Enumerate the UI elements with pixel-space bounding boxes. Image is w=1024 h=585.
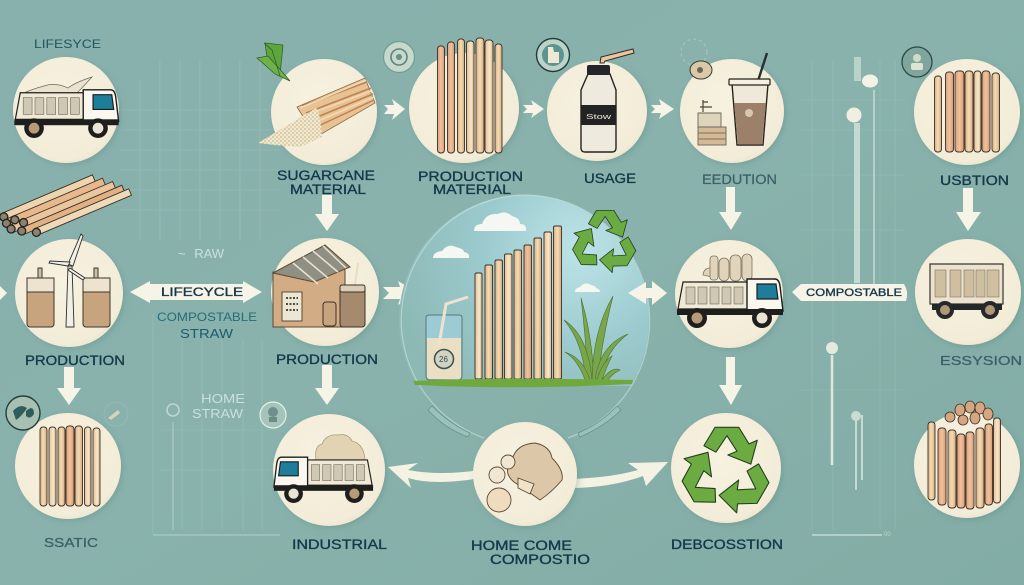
icon: straws — [40, 426, 100, 506]
icon: truck with load — [677, 254, 783, 328]
icon: straws — [438, 38, 502, 153]
faint axis caption: 00 — [884, 532, 891, 538]
label: straw: STRAW — [180, 326, 234, 341]
panel: usbtion — [914, 59, 1020, 188]
label: ssatic: SSATIC — [44, 535, 98, 550]
badge: smudge icon — [104, 402, 128, 426]
label: production: PRODUCTION — [418, 168, 523, 184]
arrow banner: lifecycle — [130, 281, 262, 303]
panel: straws bottom left — [15, 413, 121, 519]
icon: truck flipped — [274, 457, 373, 503]
circle — [914, 59, 1020, 165]
badge: roll icon — [681, 39, 712, 79]
panel: reduction — [680, 53, 784, 187]
panel: production right — [271, 238, 379, 346]
icon: dump truck — [14, 77, 119, 138]
icon: straw bundle left — [0, 164, 132, 247]
panel: truck lifecycle — [13, 39, 119, 163]
banner: compostable — [792, 284, 907, 301]
circle — [671, 413, 781, 523]
badge: figure — [260, 402, 286, 428]
faint right chart with sliders — [800, 57, 905, 535]
panel: central illustration — [399, 195, 650, 445]
icon: straws — [928, 418, 1000, 509]
panel: truck reduction — [675, 240, 783, 348]
panel: wagon — [915, 239, 1021, 345]
icon: drink cup — [729, 53, 770, 145]
badge: dark icon — [6, 396, 40, 430]
circle — [273, 414, 385, 526]
label: production left: PRODUCTION — [25, 352, 125, 368]
arrow: sugarcane down — [315, 195, 339, 231]
icon: glass with straw — [426, 297, 468, 380]
panel: industrial truck — [273, 414, 385, 526]
icon: jar with straw — [323, 263, 365, 327]
label: sugarcane: SUGARCANE — [277, 167, 375, 183]
faint left grid chart — [120, 60, 280, 535]
label: material: MATERIAL — [433, 181, 511, 197]
circle — [914, 412, 1020, 518]
icon: glass with straw: 26 — [439, 355, 448, 364]
circle — [13, 57, 119, 163]
arrow: usage to reduction — [651, 99, 674, 119]
icon: sugarcane stalks — [297, 78, 375, 137]
badge: seal — [384, 42, 414, 72]
circle glass — [399, 195, 650, 445]
circle — [915, 239, 1021, 345]
arrow: centre to truck — [628, 281, 667, 305]
arrow: production left down — [57, 367, 81, 405]
circle — [15, 413, 121, 519]
arrow banner: lifecycle: LIFECYCLE — [161, 287, 243, 299]
panel: sugarcane material — [257, 43, 377, 197]
icon: sugar grains — [258, 108, 322, 147]
label: usbtion: USBTION — [940, 173, 1009, 188]
icon: compost pile — [316, 435, 365, 460]
label: compostable: COMPOSTABLE — [157, 312, 257, 324]
panel: straw stack bottom right — [914, 401, 1020, 518]
arrow: production right down — [315, 365, 339, 405]
circle — [271, 59, 377, 165]
icon: rising straws — [475, 226, 562, 379]
label: home: HOME — [201, 391, 245, 406]
label: debcosstion: DEBCOSSTION — [671, 537, 783, 552]
label: production right: PRODUCTION — [276, 351, 378, 367]
label: material: MATERIAL — [290, 181, 366, 197]
circle — [473, 422, 577, 526]
label: straw pale: STRAW — [192, 406, 244, 421]
arrow: usbtion down — [956, 188, 981, 231]
arrow: home to recycle — [570, 462, 668, 488]
circle — [271, 238, 379, 346]
arrow: home to industrial — [388, 463, 480, 488]
arrow: left edge tip — [0, 286, 7, 300]
circle — [675, 240, 783, 348]
heading: lifesyce: LIFESYCE — [34, 39, 101, 51]
arrow: truck down — [719, 357, 742, 405]
icon: jars — [27, 268, 110, 327]
label: usage: USAGE — [584, 170, 636, 186]
label: essysion: ESSYSION — [940, 353, 1022, 368]
label: eedution: EEDUTION — [702, 172, 777, 187]
arrow: reduction down — [719, 187, 742, 230]
icon: wagon — [930, 264, 1003, 319]
icon: house — [273, 245, 350, 327]
icon: plant — [564, 296, 628, 380]
icon: straws — [934, 71, 1000, 152]
panel: recycling — [671, 413, 781, 523]
icon: wind turbine — [49, 234, 85, 327]
circle — [680, 59, 784, 163]
circle — [409, 53, 519, 163]
icon: top of stack — [945, 401, 993, 425]
panel: home compost — [473, 422, 577, 526]
circle — [547, 61, 647, 161]
banner: compostable: COMPOSTABLE — [806, 287, 902, 299]
label: compostio: COMPOSTIO — [490, 552, 590, 567]
circle — [15, 239, 123, 347]
label: home come: HOME COME — [471, 538, 572, 553]
badge: hand — [536, 38, 570, 72]
icon: bottle with straw: Stow — [586, 112, 612, 121]
badge: person — [902, 47, 932, 77]
panel: usage — [547, 49, 647, 186]
icon: cake — [698, 100, 726, 145]
ground — [413, 379, 633, 387]
panel: production left — [15, 234, 123, 347]
icon: clouds — [433, 212, 600, 292]
label: industrial: INDUSTRIAL — [292, 536, 387, 552]
arrow: production to centre — [383, 281, 418, 305]
icon: compost blob — [487, 443, 562, 512]
label: raw: ~ RAW — [178, 246, 225, 261]
arrow: production material to usage — [523, 100, 544, 118]
icon: leaf — [257, 43, 290, 81]
icon: recycling symbol — [566, 210, 640, 277]
arrow: sugarcane to production material — [384, 99, 405, 120]
panel: production material — [409, 38, 523, 197]
icon: recycling symbol — [673, 427, 774, 519]
